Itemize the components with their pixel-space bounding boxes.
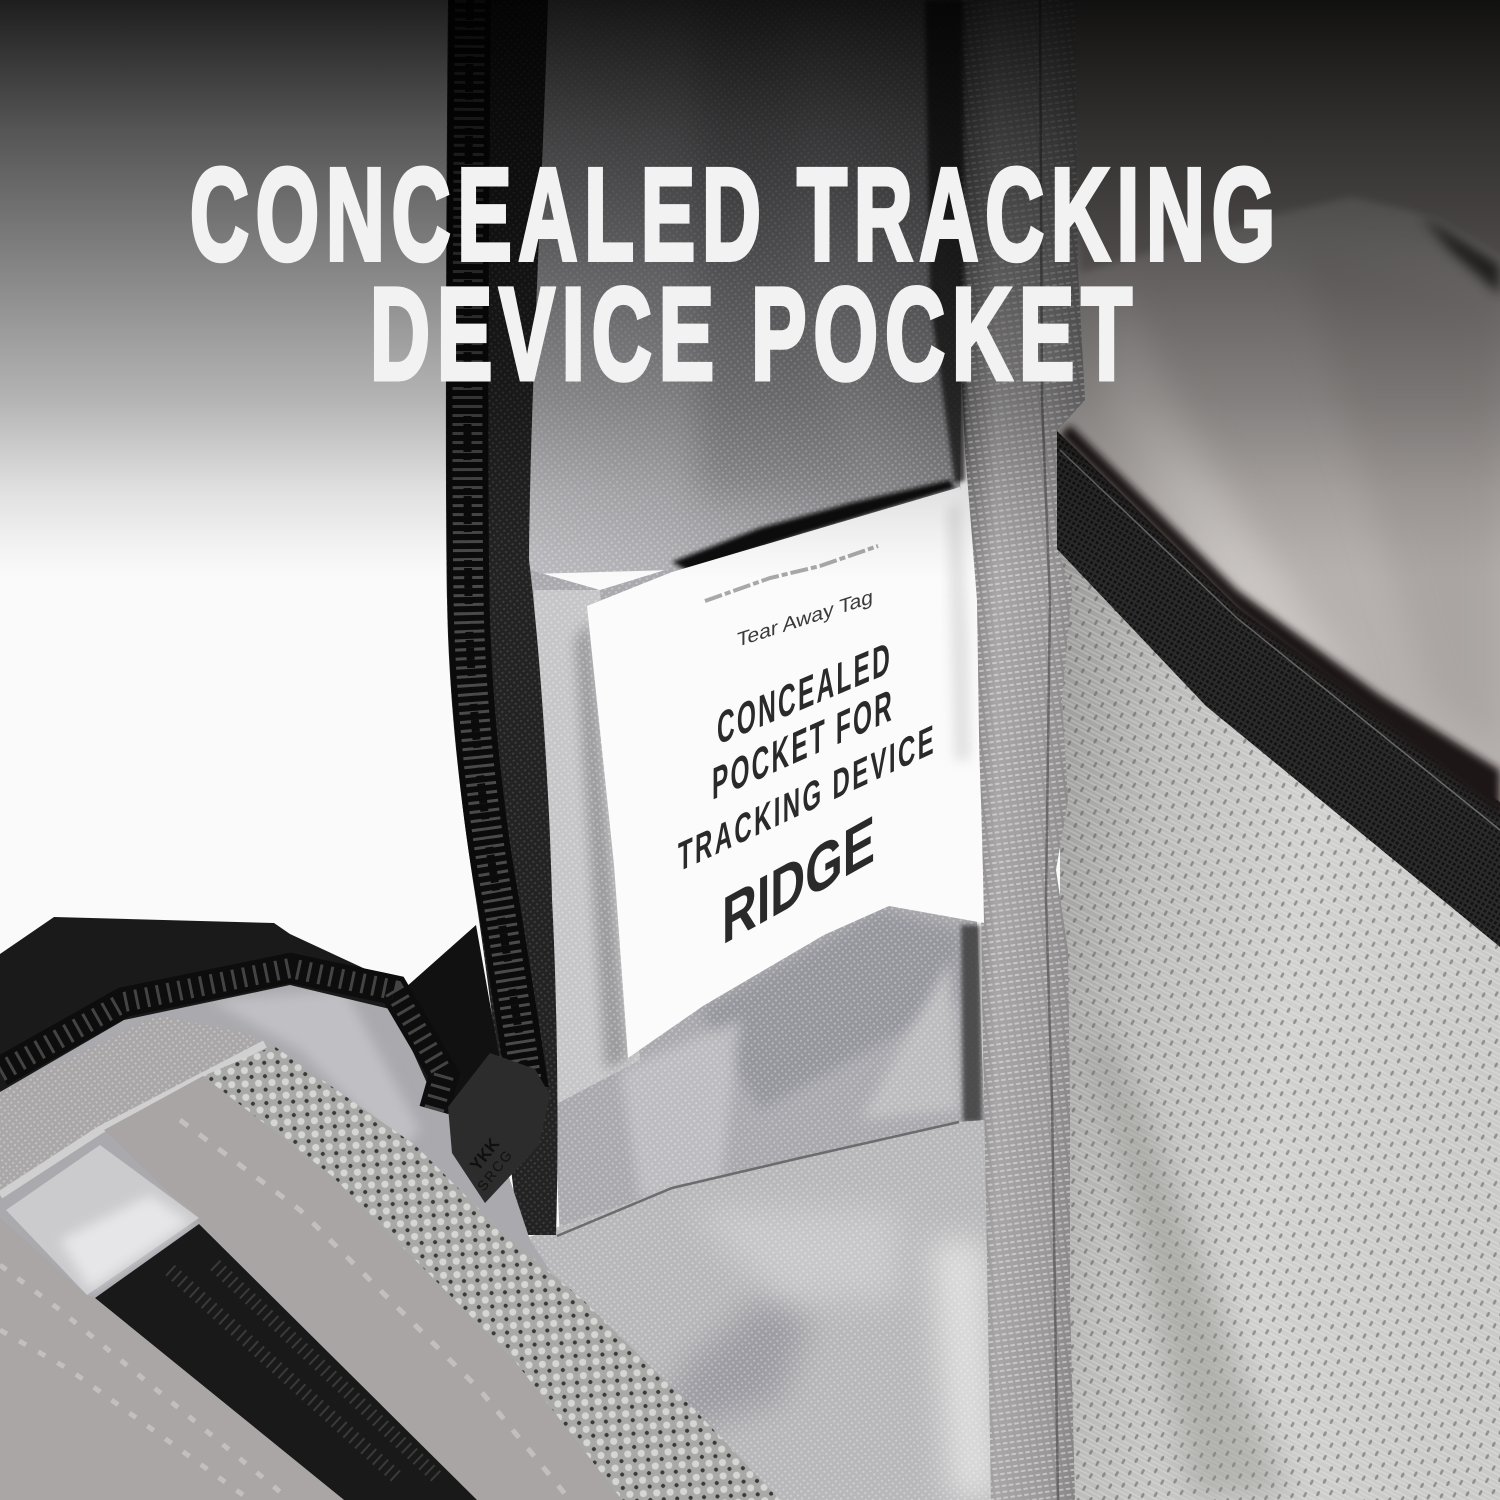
panel: right mesh pocket — [1057, 549, 1500, 1500]
panel: upper central pocket — [520, 0, 965, 574]
black strap — [95, 1224, 477, 1500]
black gusset behind zipper — [405, 925, 500, 1110]
right piping seam — [925, 0, 1085, 1500]
black fabric upper left — [0, 917, 455, 1103]
tag text: concealed: CONCEALED — [717, 632, 892, 755]
top gradient overlay — [0, 0, 1500, 580]
title — [190, 140, 1282, 407]
tag text: tear away tag: Tear Away Tag — [737, 585, 873, 652]
satin highlight — [60, 1195, 190, 1290]
lower left grey strap — [0, 1218, 344, 1500]
panel: bottom compartment lining — [520, 1120, 1000, 1500]
highlight on inner grey compartment — [210, 990, 420, 1150]
upper left grey flap — [0, 1015, 261, 1199]
flap light edge — [0, 1044, 265, 1195]
tag text: pocket for: POCKET FOR — [712, 678, 894, 810]
tag right edge shade — [948, 500, 970, 760]
panel: upper right interior lining — [1040, 0, 1500, 820]
satin panel — [6, 1145, 199, 1295]
flap fabric texture — [0, 1015, 261, 1199]
black elastic binding — [1057, 425, 1500, 947]
tag text: tracking device: TRACKING DEVICE — [678, 716, 936, 881]
grey webbing strap — [104, 1076, 622, 1500]
panel: lower central pocket — [530, 480, 985, 1240]
tear perforation — [705, 546, 878, 601]
pull engraving: YKK — [466, 1134, 504, 1174]
tag shadow — [672, 480, 955, 572]
pull engraving second line: SRCG — [474, 1146, 516, 1194]
mesh strap — [203, 1046, 780, 1500]
panel: inner grey compartment lower left — [0, 975, 700, 1500]
zipper: vertical — [446, 0, 557, 1235]
zipper pull — [448, 1053, 550, 1203]
tag logo: ridge: RIDGE — [722, 802, 875, 960]
zipper: horizontal — [0, 968, 444, 1110]
tear away tag — [587, 487, 984, 1058]
